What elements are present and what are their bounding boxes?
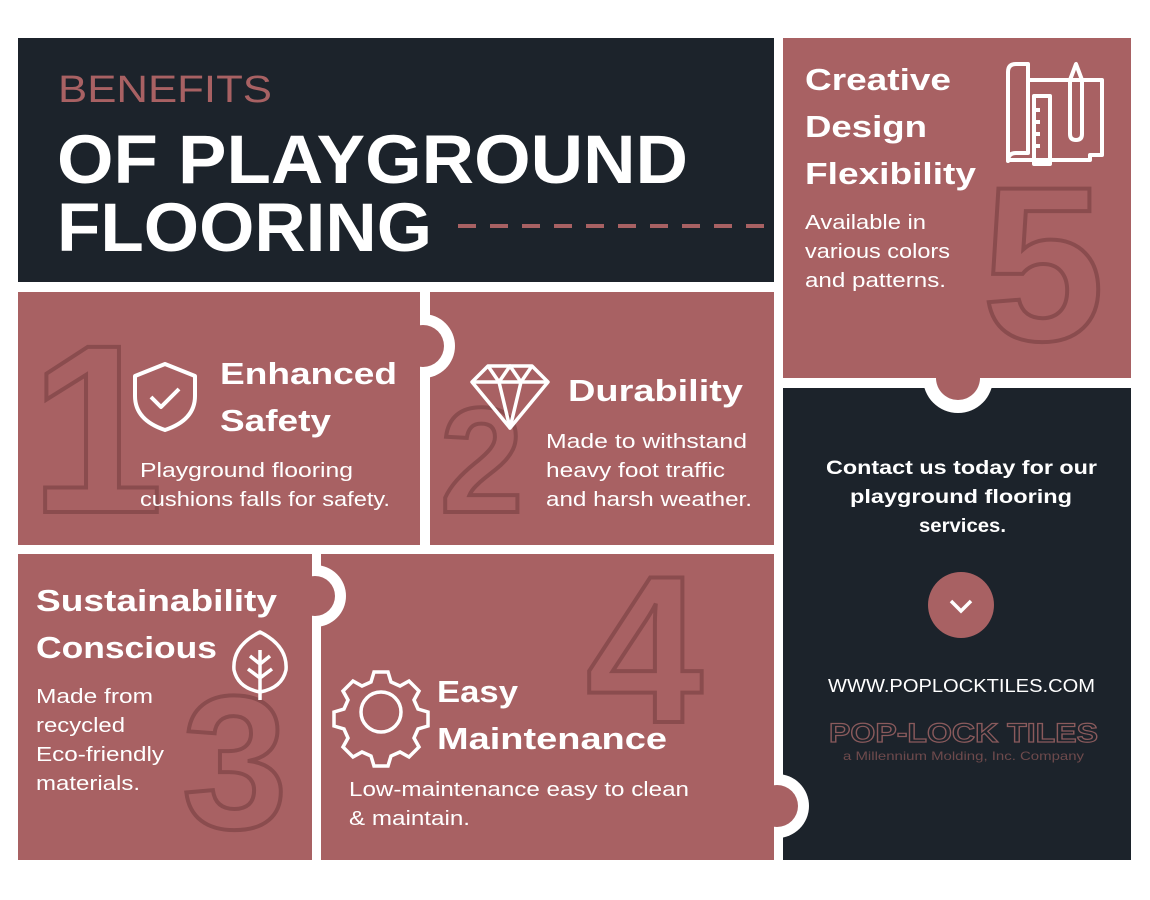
text: Eco-friendly — [36, 744, 164, 766]
heading: Safety — [220, 403, 332, 438]
text: Made from — [36, 686, 153, 708]
text: Playground flooring — [140, 460, 353, 482]
icon: gear — [334, 672, 428, 766]
panel: title — [18, 38, 774, 282]
heading: Design — [805, 109, 927, 144]
icon: blueprint — [1008, 64, 1102, 164]
contact text: Contact us today for our — [826, 458, 1098, 479]
logo — [829, 718, 1098, 763]
heading: Durability — [568, 373, 744, 408]
heading: Flexibility — [805, 156, 977, 191]
panel: sustainability — [18, 554, 312, 869]
contact text: playground flooring — [850, 487, 1072, 508]
heading: Easy — [437, 674, 519, 709]
heading: flooring: FLOORING — [57, 189, 432, 266]
icon: diamond — [472, 366, 548, 428]
heading: Maintenance — [437, 721, 667, 756]
number 2: 2 — [440, 376, 523, 544]
panel: contact — [783, 388, 1131, 860]
text: Low-maintenance easy to clean — [349, 779, 689, 801]
text: and patterns. — [805, 270, 946, 292]
dashed connector — [458, 224, 774, 228]
icon: chevron button — [928, 572, 994, 638]
contact text: services. — [919, 516, 1006, 537]
heading: Sustainability — [36, 583, 278, 618]
number 1: 1 — [30, 295, 163, 563]
logo: POP-LOCK TILES — [829, 718, 1098, 748]
number 4: 4 — [586, 532, 703, 767]
text: recycled — [36, 715, 125, 737]
text: & maintain. — [349, 808, 470, 830]
text: cushions falls for safety. — [140, 489, 390, 511]
text: Made to withstand — [546, 431, 747, 453]
text: Available in — [805, 212, 926, 234]
number 3: 3 — [182, 657, 288, 869]
text: and harsh weather. — [546, 489, 752, 511]
heading: Conscious — [36, 630, 217, 665]
text: materials. — [36, 773, 140, 795]
icon: leaf — [234, 632, 286, 700]
heading: benefits: BENEFITS — [58, 69, 272, 111]
number 5: 5 — [982, 141, 1104, 387]
heading: Enhanced — [220, 356, 397, 391]
heading: main title: OF PLAYGROUND — [57, 121, 688, 198]
text: heavy foot traffic — [546, 460, 725, 482]
website: WWW.POPLOCKTILES.COM — [828, 676, 1095, 696]
panel: easy maintenance — [321, 532, 774, 860]
heading: Creative — [805, 62, 951, 97]
icon: shield — [135, 364, 195, 430]
panel: durability — [430, 292, 774, 545]
puzzle knobs — [284, 314, 993, 838]
text: various colors — [805, 241, 950, 263]
logo: a Millennium Molding, Inc. Company — [843, 749, 1084, 763]
panel: creative design — [783, 38, 1131, 387]
panel: enhanced safety — [18, 292, 420, 563]
